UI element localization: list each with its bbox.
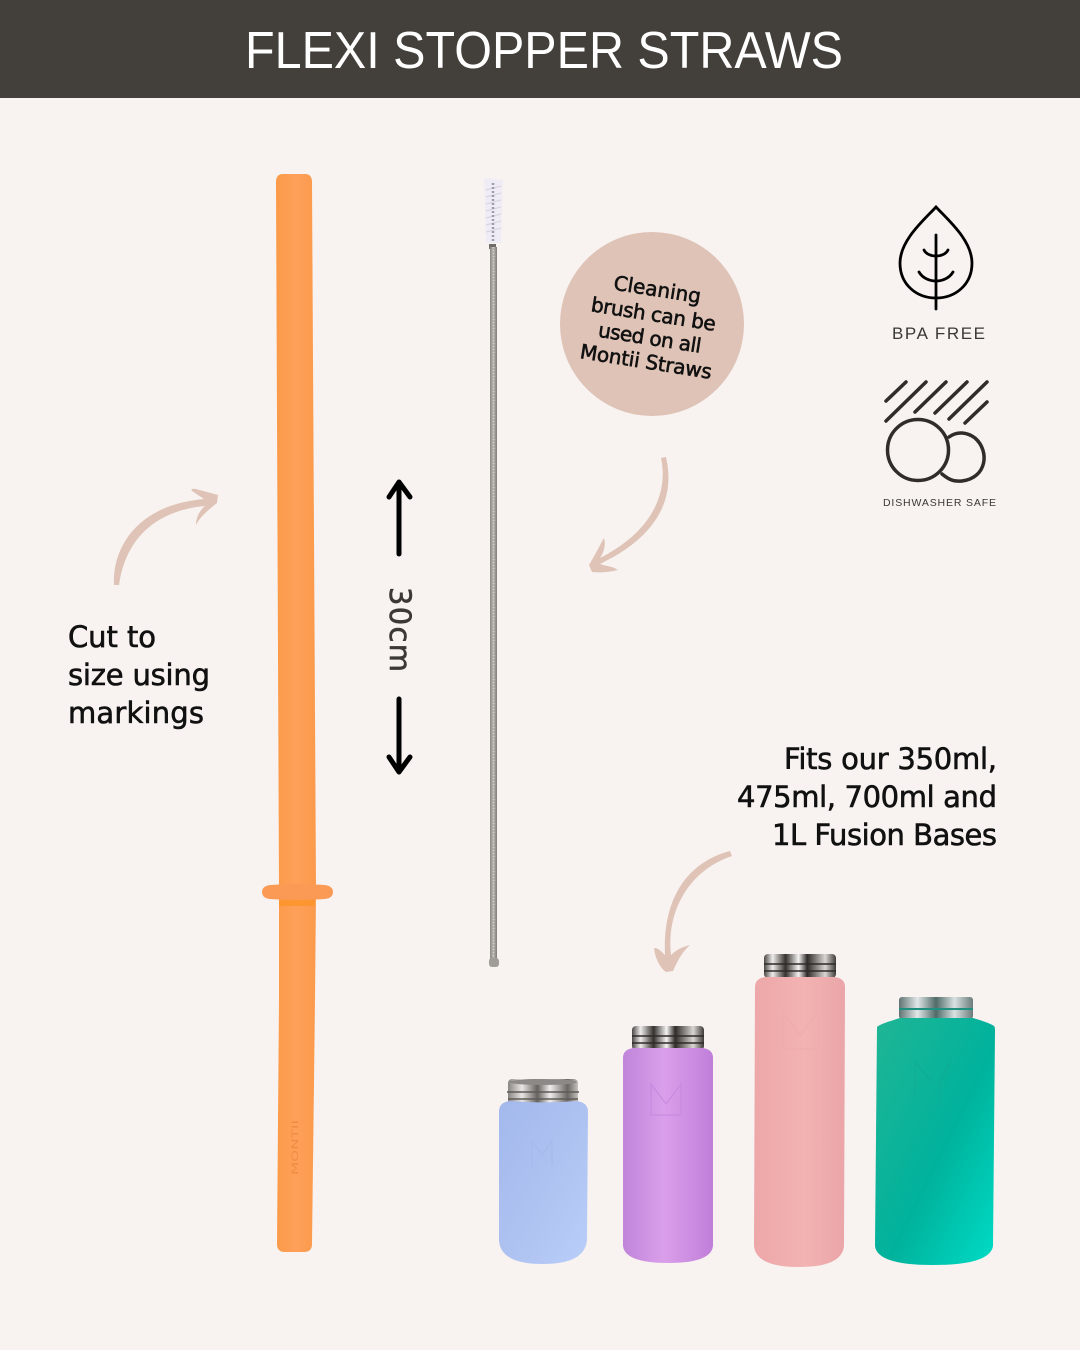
text: fits bases: Fits our 350ml, [784, 742, 997, 776]
callout: cleaning brush: used on all [597, 318, 703, 358]
header banner [0, 0, 1080, 98]
arrow: to brush [589, 457, 668, 572]
label: DISHWASHER SAFE [883, 497, 996, 509]
text: cut to size: markings [68, 696, 204, 730]
callout: cleaning brush [560, 232, 744, 416]
orange flexi straw [262, 174, 333, 1252]
text: cut to size: size using [68, 658, 210, 692]
bottle: green 1L [875, 997, 995, 1265]
bottle: pink 700ml [754, 954, 845, 1267]
callout: cleaning brush: Montii Straws [578, 339, 714, 384]
icon: dishwasher safe [883, 382, 996, 509]
text: cut to size: Cut to [68, 620, 156, 654]
label: BPA FREE [892, 324, 985, 343]
callout: cleaning brush: brush can be [589, 292, 718, 336]
title: FLEXI STOPPER STRAWS [245, 22, 843, 80]
arrow: to straw [114, 489, 218, 585]
text: fits bases [737, 742, 997, 852]
bottle: purple 475ml [623, 1026, 713, 1263]
icon: BPA free leaf [892, 207, 985, 343]
dimension: 30cm [383, 482, 417, 772]
label: 30cm [383, 587, 417, 672]
arrow up [389, 482, 410, 554]
callout: cleaning brush: Cleaning [612, 271, 703, 308]
text: fits bases: 1L Fusion Bases [772, 818, 997, 852]
orange flexi straw: MONTII [291, 1120, 301, 1175]
arrow: to bottles [654, 851, 732, 972]
bottle: blue 350ml [499, 1079, 588, 1264]
arrow down [389, 699, 410, 772]
text: fits bases: 475ml, 700ml and [737, 780, 997, 814]
cleaning brush [484, 178, 503, 967]
text: cut to size [68, 620, 210, 730]
